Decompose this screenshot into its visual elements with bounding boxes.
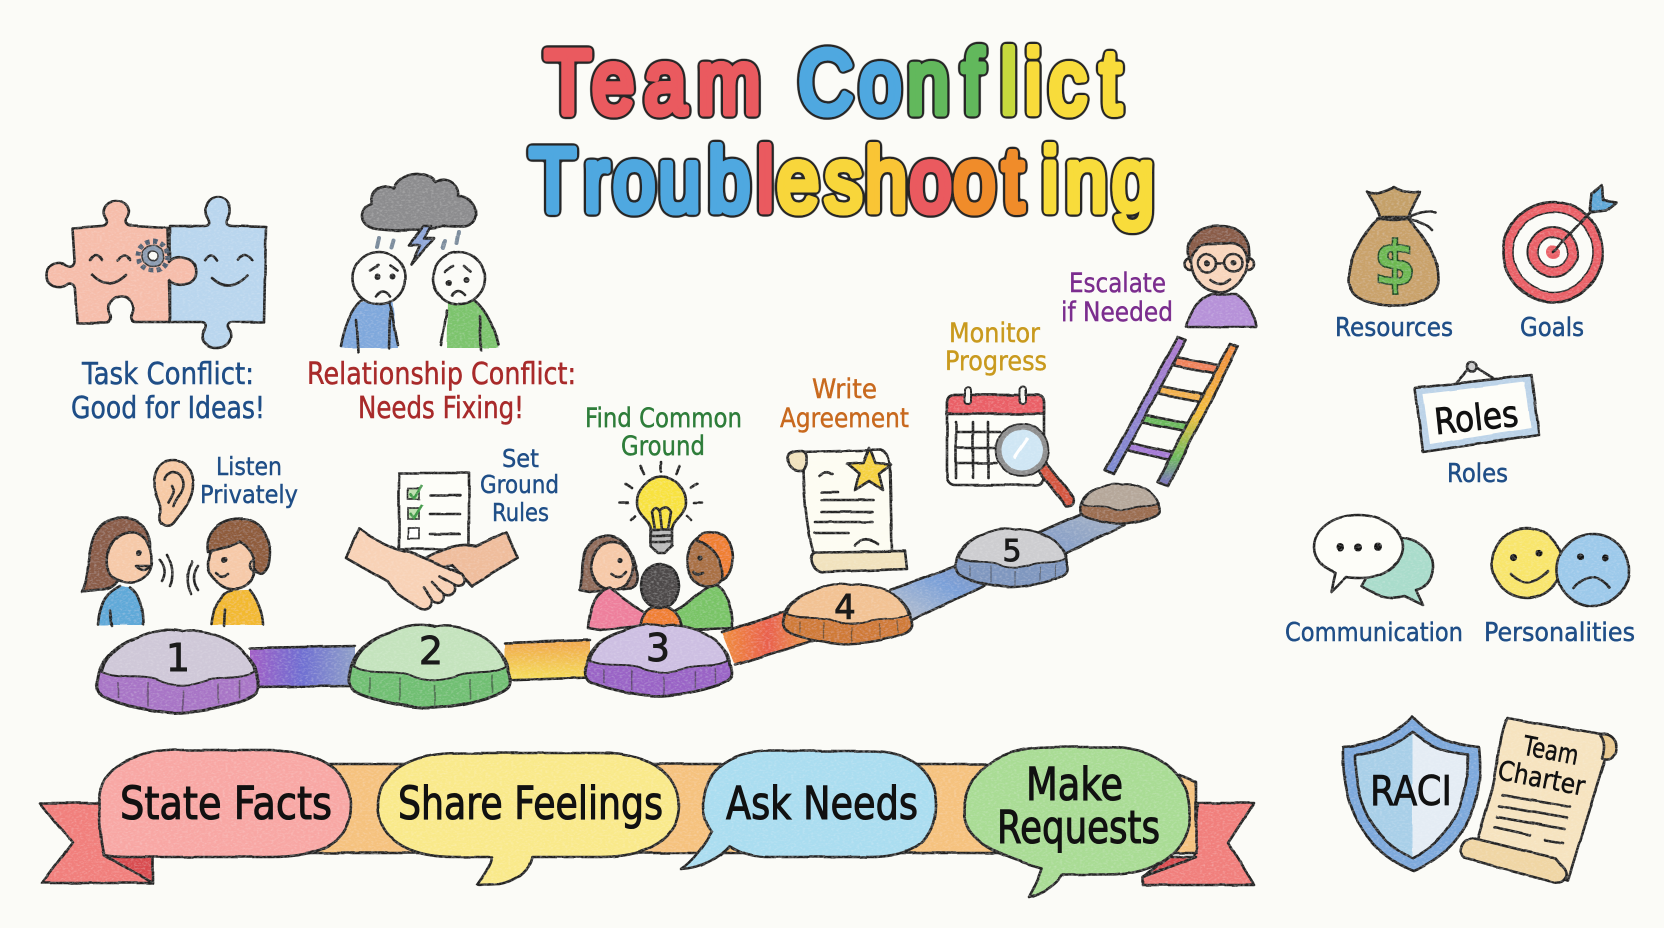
stepping stone 2 bbox=[349, 625, 510, 708]
stepping stone 3 bbox=[585, 625, 732, 696]
icon: money bag bbox=[1349, 187, 1438, 305]
label: task conflict: Good for Ideas! bbox=[71, 391, 265, 426]
bubble: ask needs: Ask Needs bbox=[726, 777, 918, 830]
label: write agreement: Agreement bbox=[780, 403, 909, 434]
label: write agreement bbox=[780, 374, 909, 434]
bubble: share feelings bbox=[378, 753, 679, 885]
title: h bbox=[865, 130, 907, 230]
ribbon left tail bbox=[40, 803, 153, 883]
step 3 illustration: people around a lightbulb bbox=[580, 462, 732, 630]
stepping stone 5: 5 bbox=[1002, 534, 1022, 569]
icon: chat bubbles bbox=[1314, 515, 1433, 605]
title: ot bbox=[953, 130, 1024, 230]
label: find common ground: Find Common bbox=[585, 403, 742, 434]
step 2 illustration: checklist and handshake bbox=[346, 473, 518, 609]
bubble: ask needs bbox=[681, 751, 936, 869]
step 6 illustration: person with glasses bbox=[1184, 226, 1256, 327]
label: set ground rules: Ground bbox=[480, 470, 559, 499]
title: ict bbox=[1025, 32, 1121, 132]
bubble: make requests: Make bbox=[1026, 758, 1123, 811]
label: set ground rules: Rules bbox=[492, 498, 549, 527]
icon: storm cloud over two sad people bbox=[341, 173, 498, 352]
title: es bbox=[777, 130, 862, 230]
label: resources: Resources bbox=[1335, 313, 1453, 343]
label: relationship conflict: Relationship Conflict: bbox=[307, 357, 576, 392]
label: escalate if needed: Escalate bbox=[1069, 268, 1166, 299]
title: l bbox=[757, 130, 774, 230]
icon: roles sign: Roles bbox=[1432, 394, 1520, 443]
stepping stone 1 bbox=[97, 630, 258, 713]
label: monitor progress bbox=[945, 318, 1047, 377]
label: find common ground: Ground bbox=[621, 431, 705, 462]
stepping stone 3: 3 bbox=[646, 626, 670, 670]
stepping stone 2: 2 bbox=[419, 629, 443, 673]
icon: smiling puzzle pieces bbox=[47, 197, 266, 348]
banner with speech bubbles bbox=[40, 747, 1254, 897]
label: personalities: Personalities bbox=[1484, 618, 1635, 648]
title: nf bbox=[907, 32, 984, 132]
label: monitor progress: Monitor bbox=[949, 318, 1041, 349]
stepping stone 4: 4 bbox=[834, 588, 856, 628]
step 1 illustration: two people talking with an ear bbox=[82, 460, 270, 626]
icon: roles sign bbox=[1415, 362, 1539, 452]
icon: money bag: $ bbox=[1373, 227, 1417, 300]
icon: team charter scroll: Team bbox=[1520, 731, 1581, 772]
icon: RACI shield bbox=[1343, 717, 1480, 871]
label: roles: Roles bbox=[1447, 459, 1508, 489]
bubble: state facts bbox=[99, 750, 351, 857]
title: Co bbox=[798, 32, 901, 132]
icon: ladder bbox=[1105, 337, 1238, 486]
icon: target with arrow bbox=[1503, 185, 1616, 302]
ribbon right tail bbox=[1143, 803, 1254, 885]
label: write agreement: Write bbox=[812, 374, 877, 405]
label: listen privately: Privately bbox=[200, 480, 298, 509]
label: set ground rules: Set bbox=[502, 444, 539, 473]
title: ing bbox=[1042, 130, 1154, 230]
label: communication: Communication bbox=[1285, 618, 1463, 648]
stepping stone 4 bbox=[783, 584, 912, 644]
title: Troub bbox=[530, 130, 750, 230]
label: set ground rules bbox=[480, 444, 559, 527]
label: listen privately: Listen bbox=[216, 452, 282, 481]
icon: team charter scroll bbox=[1461, 718, 1616, 882]
bubble: make requests: Requests bbox=[997, 801, 1160, 854]
bubble: share feelings: Share Feelings bbox=[398, 777, 663, 830]
stepping stone 6 bbox=[1080, 484, 1159, 524]
icon: happy and sad faces bbox=[1492, 528, 1629, 606]
bubble: make requests bbox=[964, 747, 1190, 897]
title: l bbox=[1000, 32, 1017, 132]
icon: team charter scroll: Charter bbox=[1495, 755, 1588, 803]
label: monitor progress: Progress bbox=[945, 346, 1047, 377]
ribbon band bbox=[150, 764, 1196, 853]
title: Team bbox=[545, 32, 761, 132]
title: o bbox=[910, 130, 952, 230]
label: relationship conflict bbox=[307, 357, 576, 426]
step 4 illustration: agreement scroll with star bbox=[788, 448, 907, 572]
stepping stone 5 bbox=[955, 529, 1068, 587]
step 5 illustration: calendar and magnifier bbox=[947, 387, 1074, 506]
label: escalate if needed: if Needed bbox=[1061, 297, 1173, 328]
icon: RACI shield: RACI bbox=[1370, 767, 1452, 815]
bubble: state facts: State Facts bbox=[120, 777, 332, 830]
label: find common ground bbox=[585, 403, 742, 462]
stepping stone 1: 1 bbox=[166, 636, 190, 680]
label: task conflict: Task Conflict: bbox=[81, 357, 254, 392]
label: goals: Goals bbox=[1520, 313, 1584, 343]
path bands bbox=[250, 510, 1125, 687]
label: relationship conflict: Needs Fixing! bbox=[358, 391, 524, 426]
label: escalate if needed bbox=[1061, 268, 1173, 328]
title bbox=[530, 32, 1154, 230]
label: task conflict bbox=[71, 357, 265, 426]
label: listen privately bbox=[200, 452, 298, 509]
